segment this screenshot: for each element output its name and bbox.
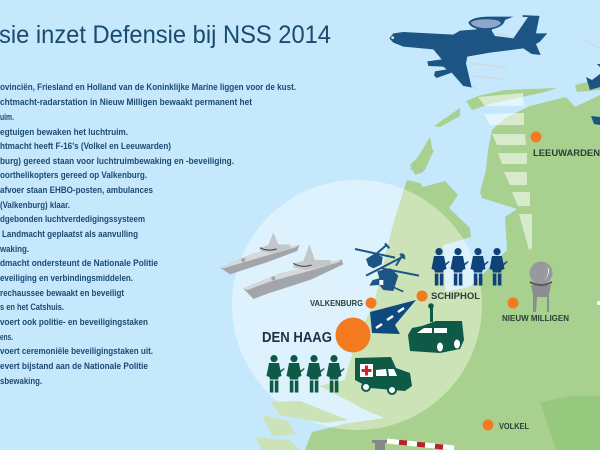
icon: frigates (220, 232, 343, 299)
title: sie inzet Defensie bij NSS 2014 (0, 21, 331, 49)
text block: list of deployments: ens. (0, 332, 13, 342)
text block: list of deployments: htmacht heeft F-16's (Volkel en Leeuwarden) (0, 141, 171, 151)
map of the Netherlands (232, 79, 600, 450)
text block: list of deployments: dgebonden luchtverdedigingssysteem (0, 214, 145, 224)
icon: radar station (530, 262, 552, 312)
icon: helicopters (355, 243, 419, 292)
marker and label: Den Haag: DEN HAAG (262, 330, 332, 346)
icon: runway arrow (370, 300, 416, 334)
text block: list of deployments: ovinciën, Friesland en Holland van de Koninklijke Marine liggen voor de kust. (0, 82, 296, 92)
text block: list of deployments: voert ceremoniële beveiligingstaken uit. (0, 346, 153, 356)
text block: list of deployments: chtmacht-radarstation in Nieuw Milligen bewaakt permanent het (0, 97, 252, 107)
text block: list of deployments: burg) gereed staan voor luchtruimbewaking en -beveiliging. (0, 156, 234, 166)
marker and label: Valkenburg (310, 298, 376, 308)
text block: list of deployments: eveiliging en verbindingsmiddelen. (0, 273, 133, 283)
text block: list of deployments: (Valkenburg) klaar. (0, 200, 70, 210)
text block: list of deployments: rechaussee bewaakt en beveiligt (0, 288, 124, 298)
marker and label: Nieuw Milligen (502, 298, 569, 323)
text block: list of deployments: s en het Catshuis. (0, 302, 64, 312)
marker and label: Schiphol: SCHIPHOL (431, 291, 481, 301)
icon: military jeep with antenna (408, 303, 464, 353)
icon: green soldiers (266, 355, 345, 392)
marker and label: Leeuwarden (530, 132, 600, 158)
text block: list of deployments: dmacht ondersteunt de Nationale Politie (0, 258, 158, 268)
marker and label: Volkel: VOLKEL (499, 422, 529, 431)
marker: white dot at right edge (597, 301, 600, 305)
text block: list of deployments: oorthelikopters gereed op Valkenburg. (0, 170, 147, 180)
marker and label: Den Haag (262, 318, 370, 352)
marker and label: Nieuw Milligen: NIEUW MILLIGEN (502, 314, 569, 323)
icon: AWACS plane (389, 16, 600, 89)
text block: list of deployments: sbewaking. (0, 376, 42, 386)
text block: list of deployments: evert bijstand aan de Nationale Politie (0, 361, 148, 371)
text block: list of deployments: voert ook politie- en beveiligingstaken (0, 317, 148, 327)
icon: F-16 jets at right edge (586, 64, 600, 125)
marker and label: Volkel (482, 420, 529, 431)
icon: ambulance (355, 357, 412, 394)
text block: list of deployments: egtuigen bewaken het luchtruim. (0, 127, 128, 137)
marker and label: Leeuwarden: LEEUWARDEN (533, 148, 600, 158)
text block: list of deployments: Landmacht geplaatst als aanvulling (2, 229, 138, 239)
text block: list of deployments (0, 82, 296, 386)
text block: list of deployments: afvoer staan EHBO-posten, ambulances (0, 185, 153, 195)
icon: navy soldiers (432, 248, 508, 286)
text block: list of deployments: uim. (0, 112, 14, 122)
icon: barrier (372, 440, 454, 450)
marker and label: Valkenburg: VALKENBURG (310, 299, 363, 308)
text block: list of deployments: waking. (0, 244, 29, 254)
marker and label: Schiphol (416, 290, 481, 302)
